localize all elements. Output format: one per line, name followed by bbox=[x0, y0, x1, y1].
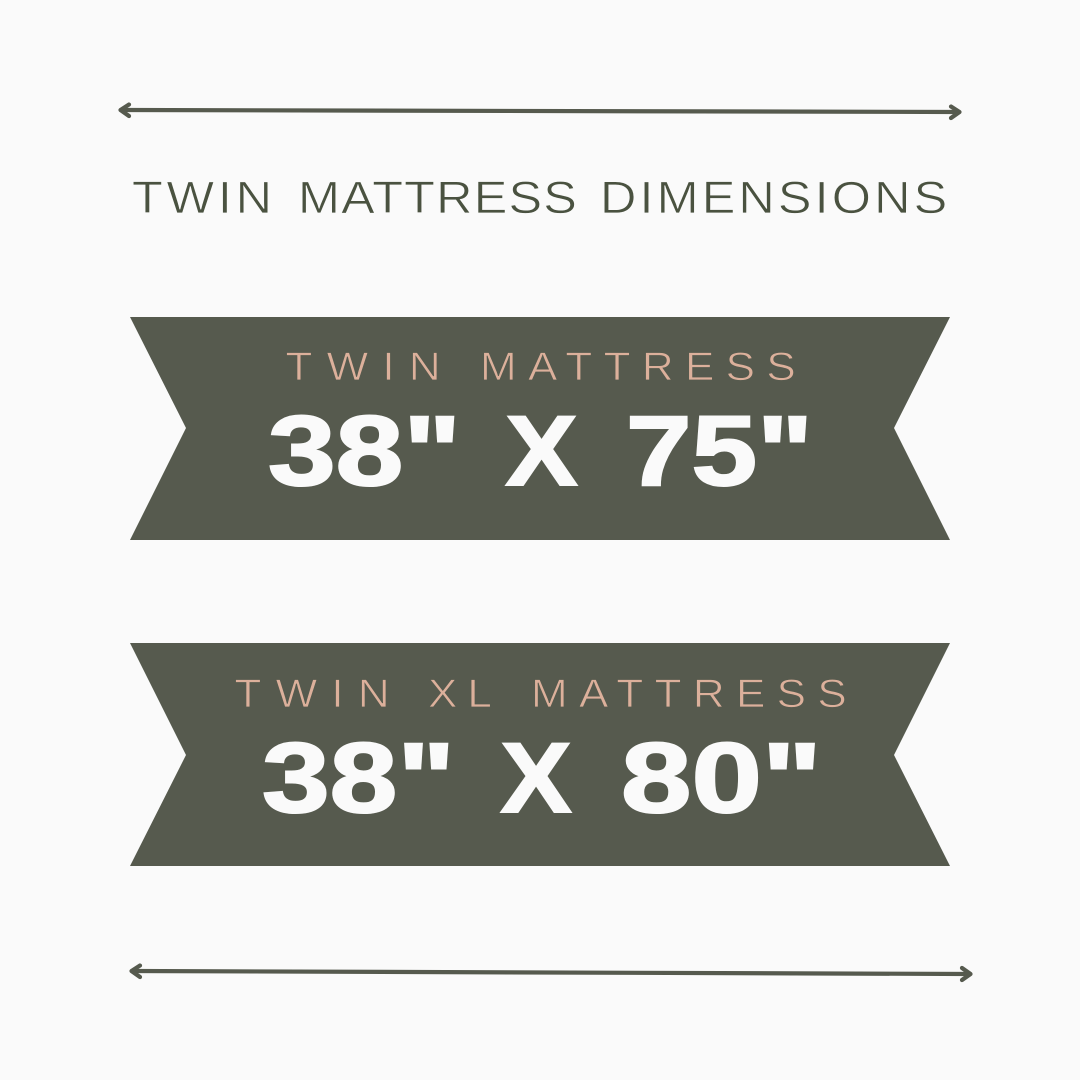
bottom double-headed arrow bbox=[132, 966, 970, 980]
label: twin mattress: MATTRESS bbox=[480, 344, 796, 389]
value: 38 by 75 inches bbox=[268, 395, 813, 506]
label: twin XL mattress: MATTRESS bbox=[531, 671, 847, 716]
top double-headed arrow bbox=[120, 104, 960, 118]
title bbox=[132, 173, 947, 223]
title: TWIN bbox=[132, 173, 272, 223]
value: 38 by 75 inches: 75" bbox=[626, 395, 813, 506]
title: DIMENSIONS bbox=[600, 173, 947, 223]
value: 38 by 80 inches bbox=[262, 722, 822, 833]
value: 38 by 75 inches: 38" bbox=[268, 395, 461, 506]
label: twin mattress: TWIN bbox=[286, 344, 441, 389]
value: 38 by 80 inches: 80" bbox=[621, 722, 822, 833]
label: twin mattress bbox=[286, 344, 796, 389]
value: 38 by 80 inches: 38" bbox=[262, 722, 455, 833]
value: 38 by 75 inches: X bbox=[506, 395, 578, 506]
title: MATTRESS bbox=[298, 173, 577, 223]
label: twin XL mattress: TWIN bbox=[234, 671, 390, 716]
panel: twin mattress banner bbox=[130, 317, 950, 540]
label: twin XL mattress: XL bbox=[428, 671, 492, 716]
label: twin XL mattress bbox=[234, 671, 847, 716]
value: 38 by 80 inches: X bbox=[500, 722, 572, 833]
panel: twin XL mattress banner bbox=[130, 643, 950, 866]
